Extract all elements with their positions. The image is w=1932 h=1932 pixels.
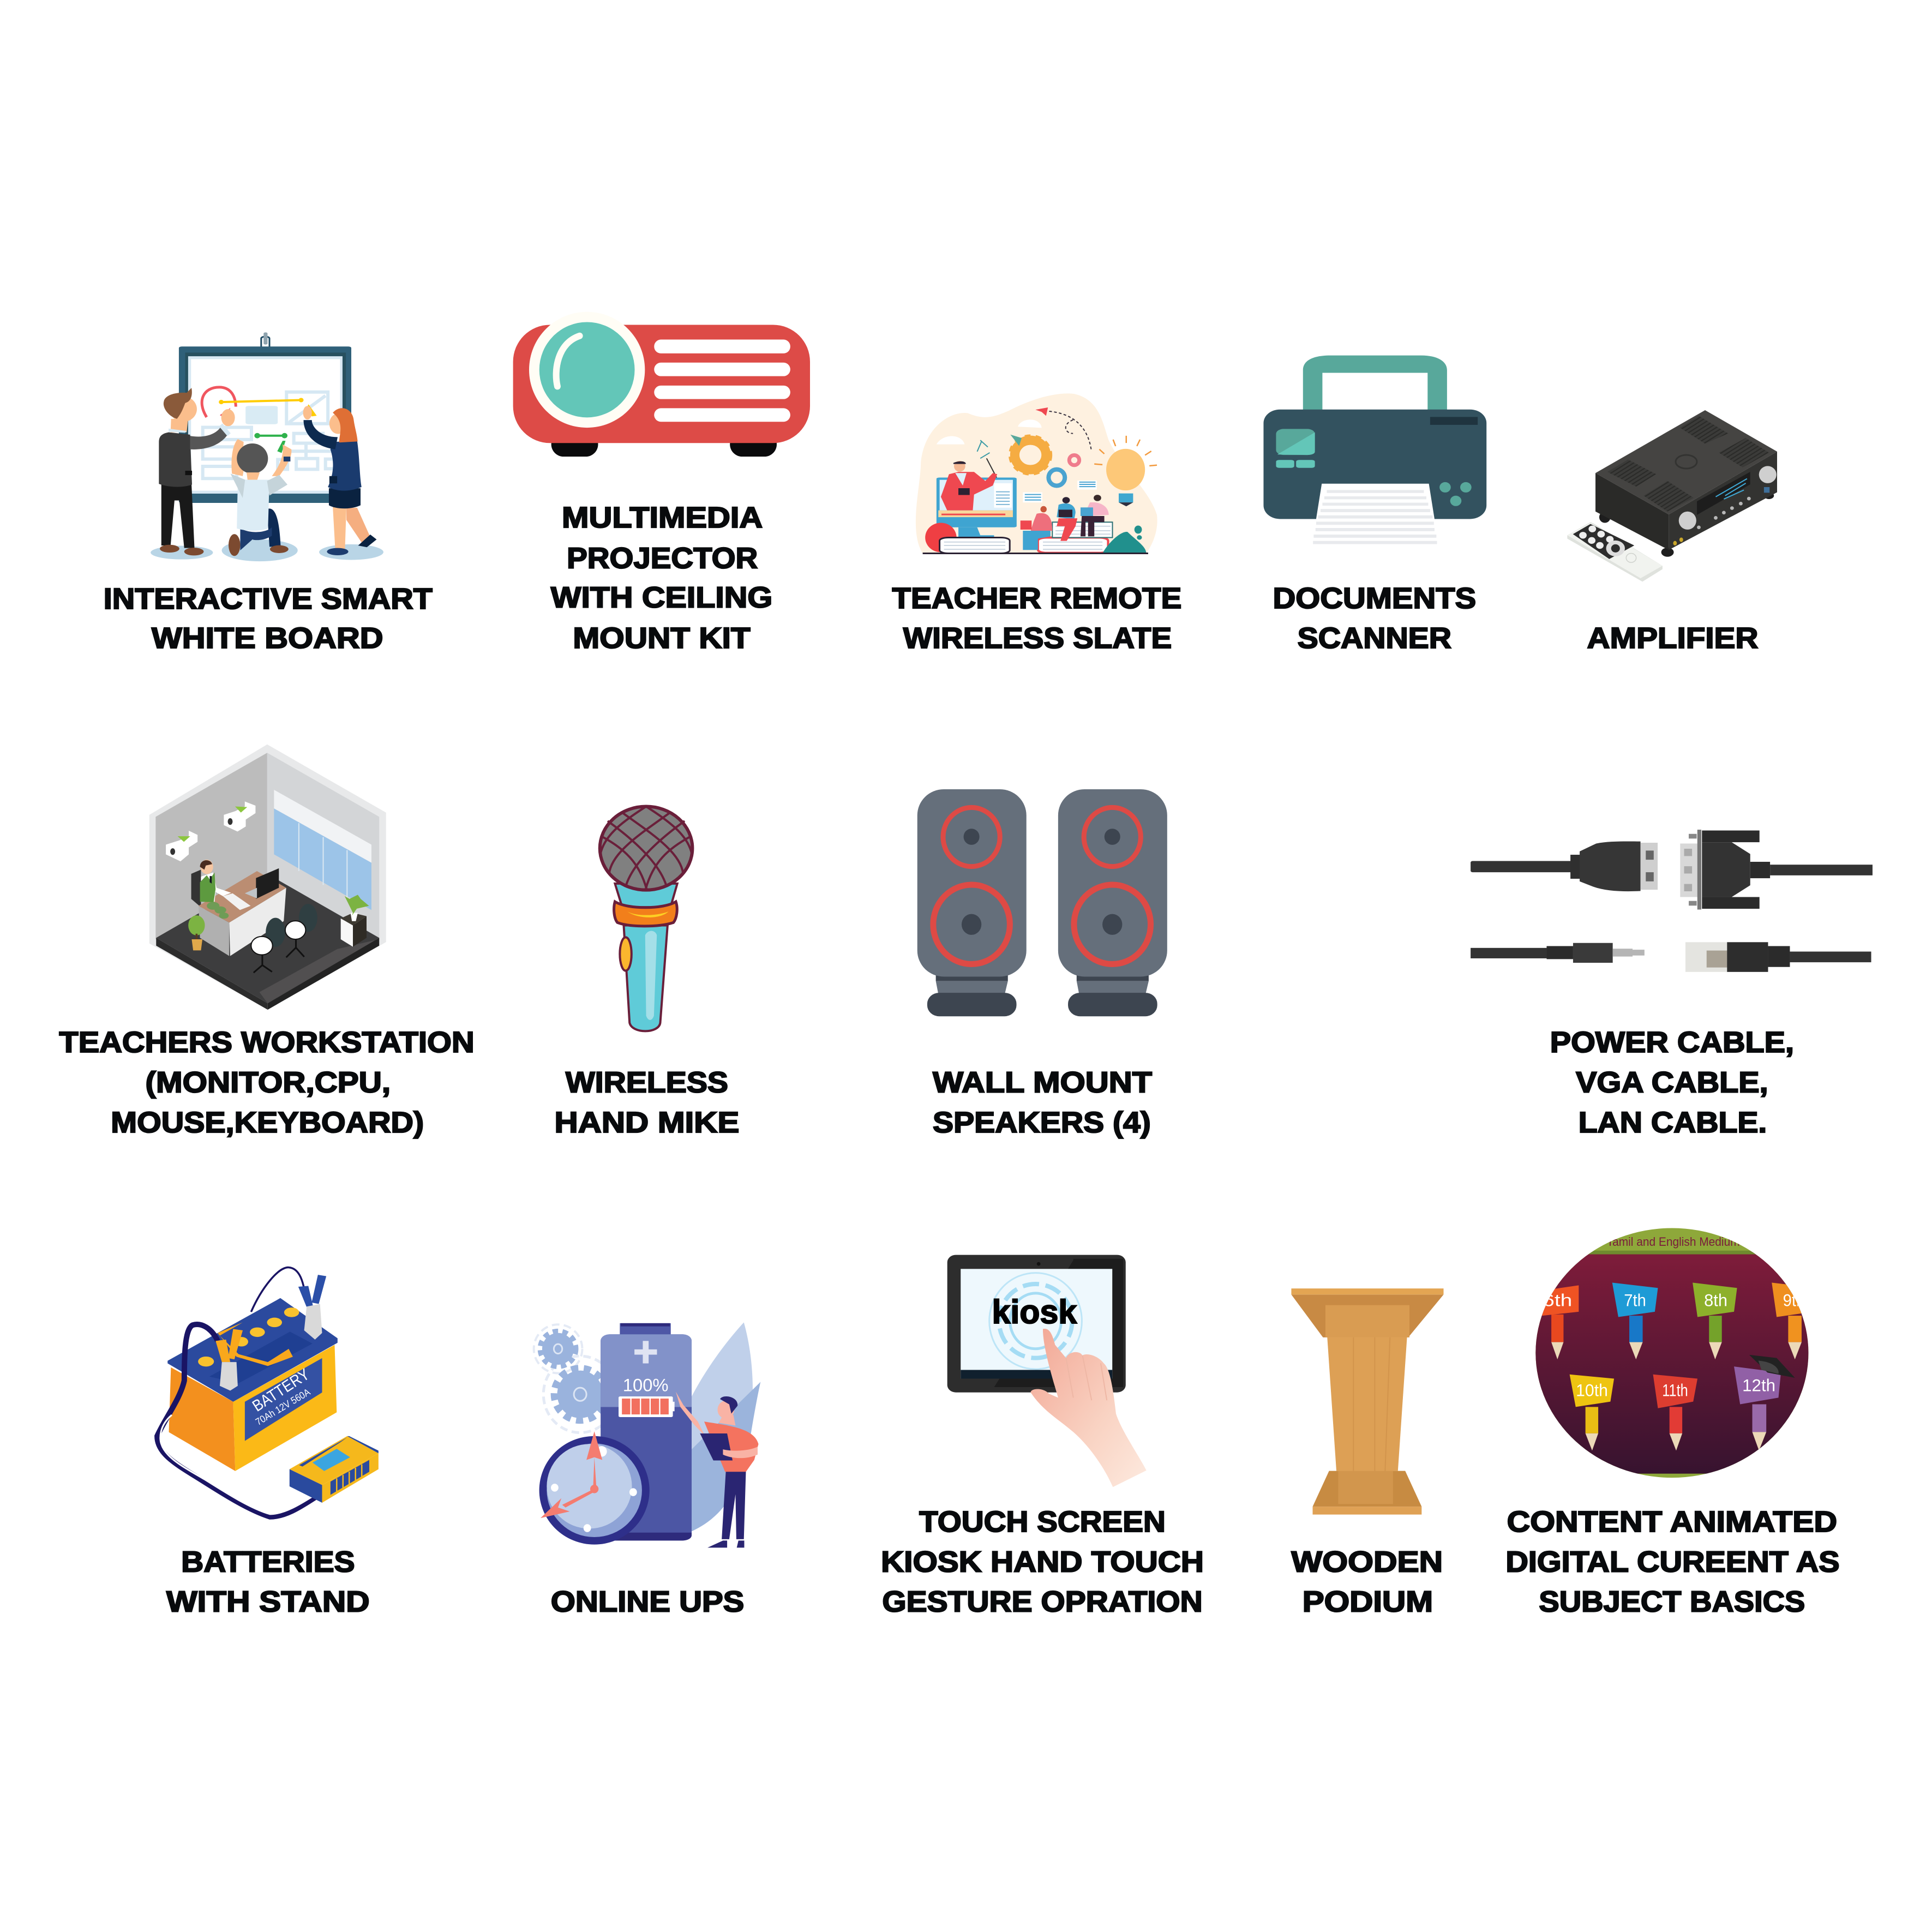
10th [1586,1407,1598,1433]
label: TEACHERS WORKSTATION [59,1026,475,1059]
item: teacher remote wireless slate [892,393,1181,655]
label: SUBJECT BASICS [1539,1586,1805,1618]
label: PROJECTOR [567,542,758,574]
illustration: car battery and charger: BATTERY [249,1365,313,1415]
label: SCANNER [1298,622,1451,655]
illustration: tablet and hand: kiosk [992,1293,1077,1330]
illustration: podium [1291,1288,1444,1515]
label [1273,582,1476,655]
label [933,1066,1152,1139]
illustration: class pencils circle: 7th [1624,1290,1646,1310]
label [1550,1026,1794,1139]
label [551,501,772,655]
label: DIGITAL CUREENT AS [1505,1545,1840,1578]
label: SPEAKERS (4) [933,1106,1151,1139]
8th [1709,1316,1722,1342]
kneeling man [231,439,244,476]
illustration: power, VGA and LAN connectors [1471,830,1873,972]
label: MOUNT KIT [573,622,751,655]
item: animated digital content [1505,1220,1840,1618]
illustration: class pencils circle: Tamil and English Medium [1607,1235,1740,1249]
item: wireless hand mike [555,807,739,1139]
label: TEACHER REMOTE [892,582,1181,615]
6th [1551,1315,1563,1342]
item: teachers workstation [59,745,475,1139]
item: wall mount speakers [917,789,1167,1139]
label [555,1066,739,1139]
plant [188,915,205,935]
illustration: class pencils circle: 9th [1783,1290,1805,1310]
woman [333,507,346,549]
9th [1788,1316,1802,1342]
label [104,583,433,655]
label: LAN CABLE. [1579,1106,1767,1139]
label: MULTIMEDIA [562,501,763,534]
illustration: tablet and hand [947,1255,1147,1487]
item: wooden podium [1291,1288,1444,1618]
chairs [266,918,285,947]
man left [161,484,194,548]
illustration: people at smart board [151,332,383,561]
students [1030,513,1052,532]
illustration: battery, clock and man [534,1322,760,1547]
label: CONTENT ANIMATED [1507,1505,1837,1538]
illustration: battery, clock and man: 100% [623,1375,669,1395]
label: WITH CEILING [551,581,772,614]
11th [1670,1407,1682,1433]
label [881,1505,1204,1618]
illustration: amplifier and remote [1567,410,1777,581]
label: PODIUM [1303,1586,1433,1618]
label [892,582,1181,655]
label: TOUCH SCREEN [919,1505,1166,1538]
item: online UPS [534,1322,760,1618]
illustration: microphone [600,807,692,1031]
illustration: scanner [1263,356,1486,544]
label [1505,1505,1840,1618]
label: WITH STAND [166,1586,370,1618]
item: touch screen kiosk [881,1255,1204,1618]
label: WOODEN [1291,1545,1443,1578]
label: (MONITOR,CPU, [146,1066,391,1099]
7th [1629,1316,1643,1342]
label [1291,1545,1443,1618]
label: VGA CABLE, [1576,1066,1768,1099]
label: WIRELESS SLATE [903,622,1172,655]
item: documents scanner [1263,356,1486,655]
illustration: projector [513,312,810,457]
label: WALL MOUNT [933,1066,1152,1099]
illustration: class pencils circle: 10th [1576,1380,1608,1400]
label: ONLINE UPS [551,1586,744,1618]
label [59,1026,475,1139]
label: POWER CABLE, [1550,1026,1794,1059]
label: HAND MIKE [555,1106,739,1139]
illustration: car battery and charger: 70Ah 12V 560A [254,1386,313,1427]
label: AMPLIFIER [1587,622,1758,655]
illustration: class pencils circle: 6th [1543,1290,1572,1310]
illustration: class pencils circle: 11th [1662,1380,1688,1400]
label: GESTURE OPRATION [882,1586,1203,1618]
illustration: car battery and charger [157,1268,379,1517]
label [166,1545,370,1618]
label: WIRELESS [566,1066,728,1099]
desk [191,869,201,907]
illustration: two speakers [917,789,1167,1016]
item: amplifier [1567,410,1777,655]
label: WHITE BOARD [152,622,383,655]
illustration: class pencils circle [1535,1228,1809,1478]
label: DOCUMENTS [1273,582,1476,615]
illustration: isometric office [149,745,386,1010]
12th [1753,1405,1766,1432]
teacher [201,873,231,902]
label: KIOSK HAND TOUCH [881,1545,1204,1578]
wall shelves [166,801,255,861]
item: multimedia projector [513,312,810,655]
item: cables [1471,830,1873,1139]
label: BATTERIES [181,1545,355,1578]
label: MOUSE,KEYBOARD) [111,1106,424,1139]
cabinet [341,919,353,947]
item: batteries with stand [157,1268,379,1618]
illustration: class pencils circle: 8th [1704,1290,1727,1310]
illustration: teacher with students [916,393,1157,553]
item: interactive smart white board [104,332,433,655]
label: INTERACTIVE SMART [104,583,433,615]
illustration: class pencils circle: 12th [1742,1375,1775,1395]
